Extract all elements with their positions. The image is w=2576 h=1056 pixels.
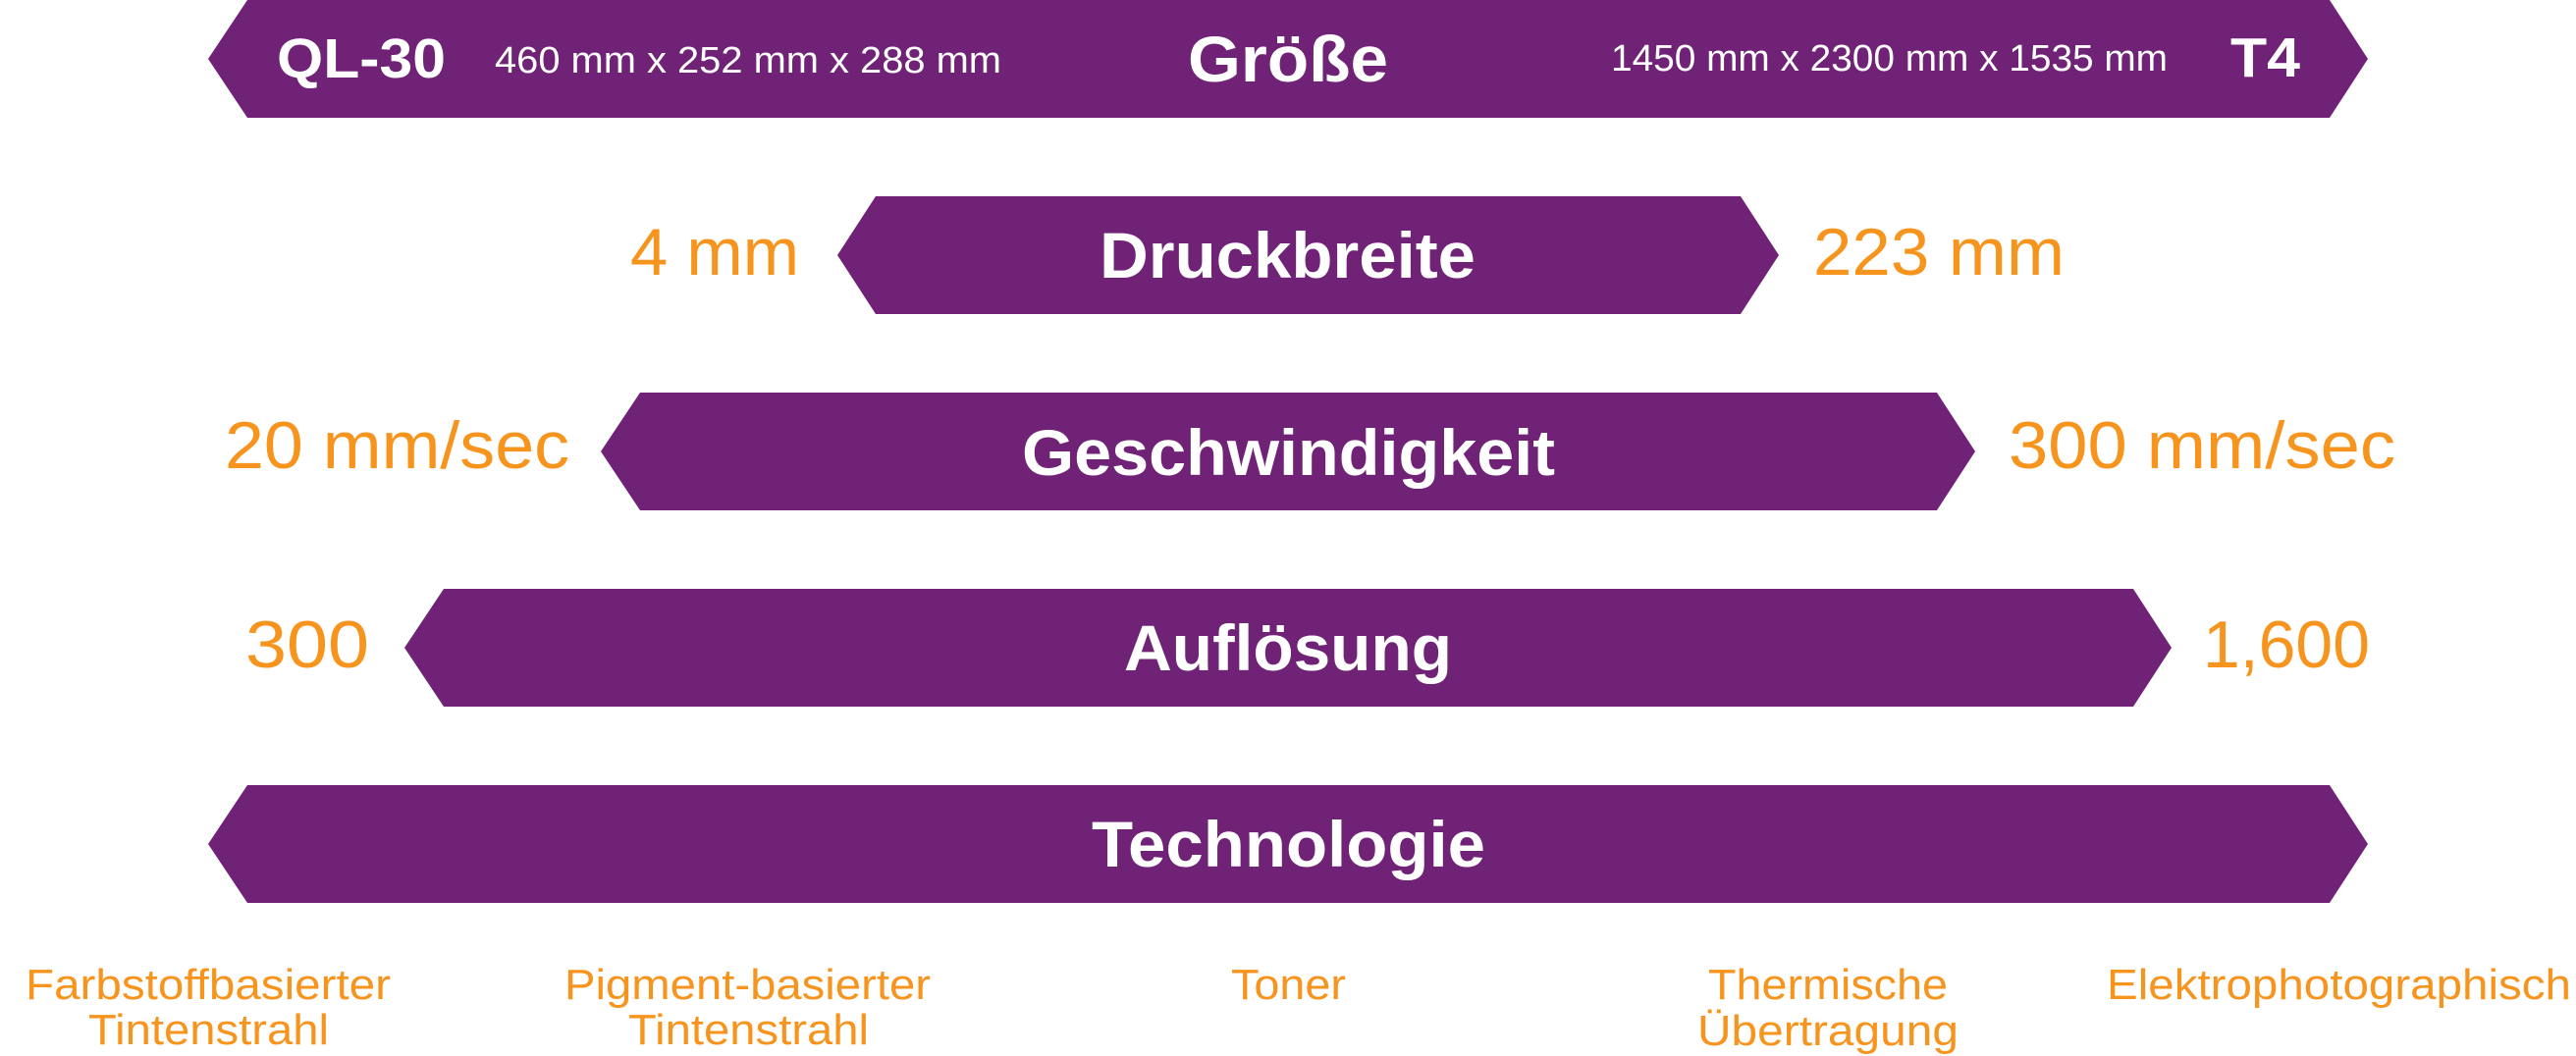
model label: QL-30: QL-30 [277,27,446,90]
heading: Geschwindigkeit: Geschwindigkeit [1022,416,1555,489]
label: Thermische Übertragung: Übertragung [1697,1007,1959,1055]
value: maximum resolution: 1,600 [2203,607,2370,682]
row: Technologie [208,785,2368,903]
label: Pigment-basierter Tintenstrahl: Tintenstrahl [628,1006,869,1054]
label: Elektrophotographisch: Elektrophotographisch [2107,961,2571,1009]
bar: Technologie [208,785,2368,903]
row: Geschwindigkeit [225,393,2395,510]
heading: Technologie: Technologie [1092,808,1485,880]
value: maximum print width: 223 mm [1813,215,2065,290]
value: minimum speed: 20 mm/sec [225,408,569,483]
label: Pigment-basierter Tintenstrahl: Pigment-basierter [564,961,931,1009]
label: Farbstoffbasierter Tintenstrahl [26,961,391,1054]
row: Auflösung [245,589,2370,707]
heading: Auflösung: Auflösung [1124,611,1452,684]
heading: Druckbreite: Druckbreite [1100,219,1476,291]
model label: T4: T4 [2230,26,2300,89]
bar: Größe [208,0,2368,118]
value: minimum print width: 4 mm [630,215,799,290]
bar: Geschwindigkeit [601,393,1975,510]
label: Farbstoffbasierter Tintenstrahl: Farbstoffbasierter [26,961,391,1009]
row: Druckbreite [630,196,2065,314]
label: Thermische Übertragung: Thermische [1708,961,1948,1009]
heading: Größe: Größe [1188,23,1388,95]
bar: Druckbreite [837,196,1779,314]
label: Thermische Übertragung [1697,961,1959,1055]
value: maximum speed: 300 mm/sec [2009,408,2395,483]
row: Größe [208,0,2368,118]
bar: Auflösung [404,589,2172,707]
value: minimum resolution: 300 [245,607,369,682]
label: Pigment-basierter Tintenstrahl [564,961,931,1054]
label: Farbstoffbasierter Tintenstrahl: Tintenstrahl [88,1006,329,1054]
dimensions: QL-30: 460 mm x 252 mm x 288 mm [495,40,1001,81]
label: Toner: Toner [1231,961,1346,1009]
dimensions: T4: 1450 mm x 2300 mm x 1535 mm [1611,38,2168,79]
